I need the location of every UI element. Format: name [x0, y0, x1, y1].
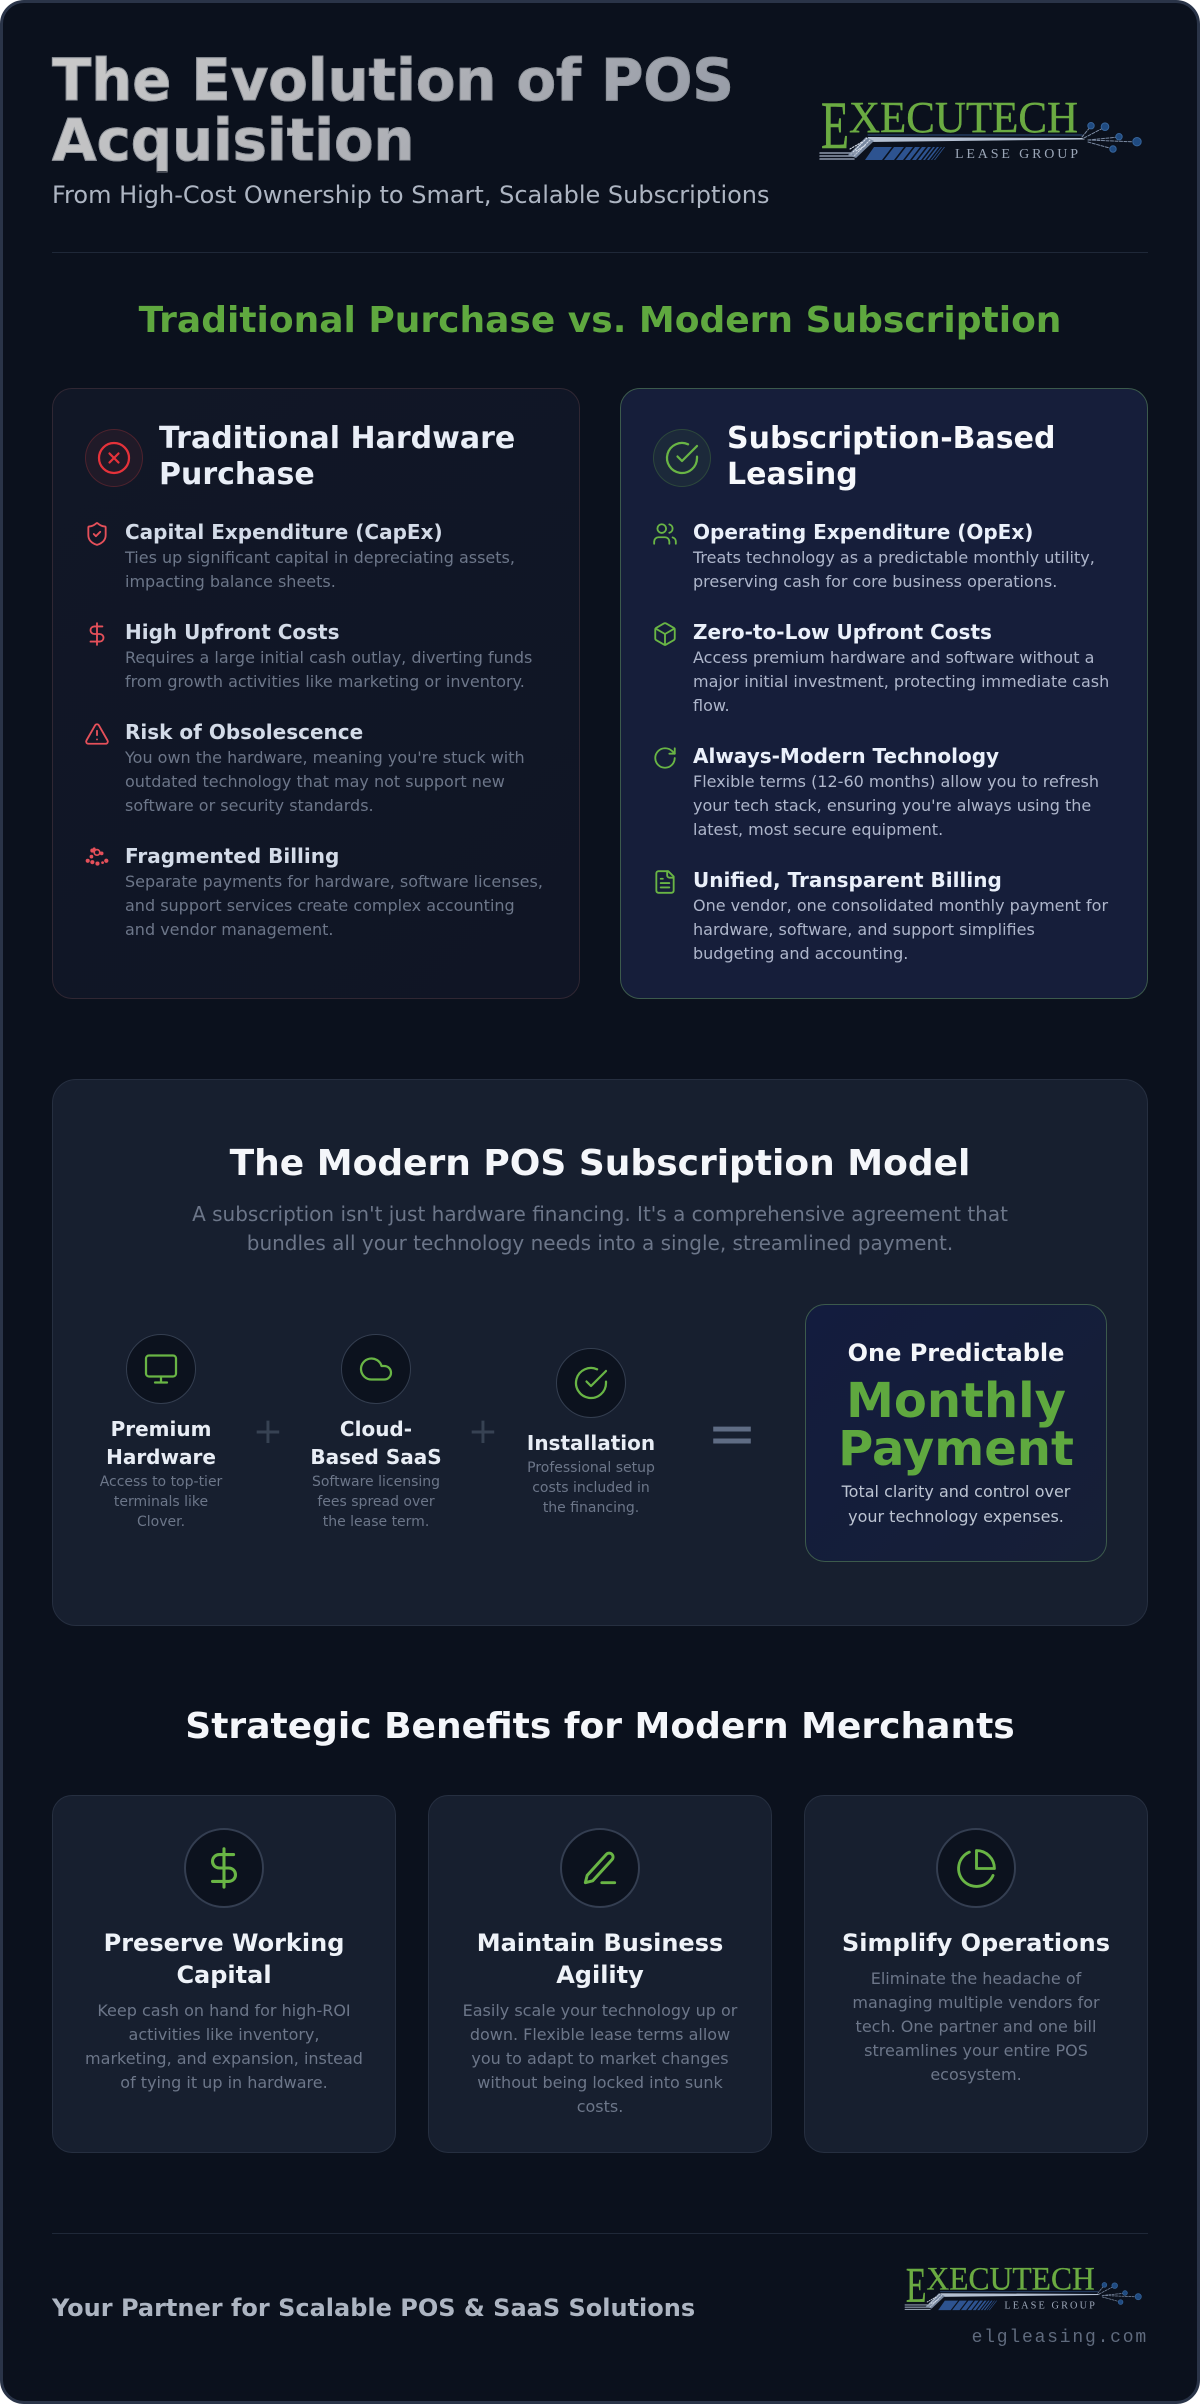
panel: traditional hardware purchase: Ties up significant capital in depreciating assets,: [125, 548, 515, 567]
heading: strategic benefits: Strategic Benefits for Modern Merchants: [185, 1706, 1015, 1747]
panel: subscription-based leasing: Zero-to-Low Upfront Costs: [693, 620, 992, 644]
callout: one predictable monthly payment: One Predictable: [848, 1339, 1064, 1367]
benefit card: simplify operations: [804, 1795, 1148, 2153]
benefit card: business agility: Agility: [556, 1961, 644, 1989]
panel: modern POS subscription model: [52, 1079, 1148, 1626]
step: cloud SaaS: Cloud-: [340, 1417, 412, 1441]
benefit card: working capital: activities like inventory,: [129, 2025, 319, 2044]
benefit card: simplify operations: Simplify Operations: [842, 1929, 1110, 1957]
logo: Executech Lease Group: E: [821, 87, 849, 163]
panel: traditional hardware purchase: impacting balance sheets.: [125, 572, 336, 591]
step: cloud SaaS: the lease term.: [323, 1514, 429, 1530]
benefit card: working capital: of tying it up in hardware.: [120, 2073, 328, 2092]
benefit card: business agility: down. Flexible lease terms allow: [470, 2025, 730, 2044]
callout: one predictable monthly payment: [805, 1304, 1107, 1562]
panel: traditional hardware purchase: Capital Expenditure (CapEx): [125, 520, 443, 544]
panel heading: Subscription-Based: [727, 421, 1055, 456]
header title: The Evolution of POS: [52, 47, 734, 114]
benefit card: business agility: without being locked into sunk: [477, 2073, 723, 2092]
item: opex: [653, 520, 1095, 591]
benefit card: working capital: Keep cash on hand for high-ROI: [97, 2001, 351, 2020]
panel: traditional hardware purchase: You own the hardware, meaning you're stuck with: [125, 748, 525, 767]
step: premium hardware: terminals like: [114, 1494, 208, 1510]
step: premium hardware: [100, 1334, 222, 1530]
panel: subscription-based leasing: Operating Expenditure (OpEx): [693, 520, 1033, 544]
icon: check circle: [653, 429, 711, 487]
item: fragmented billing: [86, 844, 543, 939]
panel: subscription-based leasing: Treats technology as a predictable monthly utility,: [693, 548, 1095, 567]
icon: cloud: [341, 1334, 411, 1404]
benefit card: business agility: Easily scale your technology up or: [463, 2001, 737, 2020]
plus sign: +: [468, 1411, 498, 1452]
panel: subscription-based leasing: One vendor, one consolidated monthly payment for: [693, 896, 1108, 915]
equals sign: =: [707, 1399, 757, 1469]
icon: monitor: [126, 1334, 196, 1404]
panel heading: [159, 421, 515, 492]
panel: traditional hardware purchase: [52, 388, 580, 999]
panel heading: Traditional Hardware: [159, 421, 515, 456]
step: installation: [527, 1348, 655, 1516]
icon: x circle: [85, 429, 143, 487]
panel: subscription-based leasing: latest, most secure equipment.: [693, 820, 943, 839]
step: premium hardware: Hardware: [106, 1445, 216, 1469]
text: subscription model intro: A subscription isn't just hardware financing. It's a comprehensive agreement that: [192, 1202, 1008, 1226]
item: upfront costs: [90, 620, 532, 691]
item: obsolescence: [85, 720, 525, 815]
icon: pie chart: [936, 1828, 1016, 1908]
section heading: comparison: Traditional Purchase vs. Modern Subscription: [139, 300, 1061, 341]
plus sign: +: [253, 1411, 283, 1452]
icon: dollar: [184, 1828, 264, 1908]
callout: one predictable monthly payment: Total clarity and control over: [842, 1482, 1070, 1501]
panel: traditional hardware purchase: and support services create complex accounting: [125, 896, 515, 915]
callout: one predictable monthly payment: Monthly: [846, 1373, 1066, 1429]
text: subscription model intro: bundles all your technology needs into a single, streamlined payment.: [247, 1231, 953, 1255]
panel: traditional hardware purchase: High Upfront Costs: [125, 620, 340, 644]
footer logo: XECUTECH: [926, 2261, 1095, 2297]
step: premium hardware: Access to top-tier: [100, 1474, 222, 1490]
footer logo: LEASE GROUP: [1004, 2301, 1095, 2312]
panel: subscription-based leasing: Flexible terms (12-60 months) allow you to refresh: [693, 772, 1099, 791]
step: cloud SaaS: Based SaaS: [310, 1445, 442, 1469]
benefit card: business agility: you to adapt to market changes: [471, 2049, 729, 2068]
step: premium hardware: Premium: [111, 1417, 211, 1441]
heading: subscription model: The Modern POS Subscription Model: [230, 1143, 970, 1184]
panel: traditional hardware purchase: from growth activities like marketing or inventory.: [125, 672, 525, 691]
step: cloud SaaS: [310, 1334, 442, 1530]
panel: subscription-based leasing: budgeting and accounting.: [693, 944, 908, 963]
panel: subscription-based leasing: flow.: [693, 696, 730, 715]
step: installation: the financing.: [543, 1500, 639, 1516]
panel: traditional hardware purchase: outdated technology that may not support new: [125, 772, 505, 791]
footer tagline: Your Partner for Scalable POS & SaaS Solutions: [52, 2294, 695, 2322]
panel: subscription-based leasing: hardware, software, and support simplifies: [693, 920, 1035, 939]
panel heading: Leasing: [727, 457, 858, 492]
panel: traditional hardware purchase: software or security standards.: [125, 796, 374, 815]
callout: one predictable monthly payment: Payment: [838, 1421, 1074, 1477]
panel: traditional hardware purchase: Requires a large initial cash outlay, diverting funds: [125, 648, 532, 667]
benefit card: simplify operations: ecosystem.: [930, 2065, 1022, 2084]
item: upfront costs: [654, 620, 1109, 715]
item: modern technology: [654, 744, 1099, 839]
callout: one predictable monthly payment: your technology expenses.: [848, 1507, 1064, 1526]
step: installation: Installation: [527, 1431, 655, 1455]
panel: subscription-based leasing: [620, 388, 1148, 999]
step: cloud SaaS: fees spread over: [317, 1494, 435, 1510]
panel: traditional hardware purchase: and vendor management.: [125, 920, 334, 939]
panel: subscription-based leasing: preserving cash for core business operations.: [693, 572, 1057, 591]
panel: traditional hardware purchase: Fragmented Billing: [125, 844, 339, 868]
header title: [52, 51, 734, 171]
logo: Executech Lease Group: LEASE GROUP: [955, 147, 1078, 162]
icon: check circle: [556, 1348, 626, 1418]
step: installation: Professional setup: [527, 1460, 655, 1476]
benefit card: business agility: costs.: [577, 2097, 623, 2116]
step: premium hardware: Clover.: [137, 1514, 185, 1530]
footer logo: E: [906, 2256, 926, 2312]
benefit card: simplify operations: managing multiple vendors for: [852, 1993, 1100, 2012]
header title: Acquisition: [52, 107, 415, 174]
panel: subscription-based leasing: Always-Modern Technology: [693, 744, 999, 768]
logo: Executech Lease Group: XECUTECH: [849, 93, 1078, 142]
step: installation: costs included in: [532, 1480, 650, 1496]
panel: subscription-based leasing: Access premium hardware and software without a: [693, 648, 1094, 667]
benefit card: working capital: Capital: [176, 1961, 272, 1989]
benefit card: simplify operations: streamlines your entire POS: [864, 2041, 1088, 2060]
benefit card: business agility: [428, 1795, 772, 2153]
header subtitle: From High-Cost Ownership to Smart, Scalable Subscriptions: [52, 181, 770, 209]
panel heading: Purchase: [159, 457, 315, 492]
panel: subscription-based leasing: Unified, Transparent Billing: [693, 868, 1002, 892]
logo: Executech Lease Group: [819, 87, 1142, 163]
text: subscription model intro: [192, 1202, 1008, 1255]
benefit card: working capital: Preserve Working: [104, 1929, 344, 1957]
benefit card: working capital: [52, 1795, 396, 2153]
benefit card: simplify operations: Eliminate the headache of: [871, 1969, 1081, 1988]
benefit card: business agility: Maintain Business: [477, 1929, 723, 1957]
footer logo: [904, 2256, 1142, 2312]
panel: subscription-based leasing: major initial investment, protecting immediate cash: [693, 672, 1109, 691]
item: unified billing: [655, 868, 1108, 963]
item: capex: [87, 520, 515, 591]
step: cloud SaaS: Software licensing: [312, 1474, 440, 1490]
panel: traditional hardware purchase: Risk of Obsolescence: [125, 720, 363, 744]
benefit card: simplify operations: tech. One partner and one bill: [856, 2017, 1096, 2036]
panel heading: [727, 421, 1055, 492]
panel: traditional hardware purchase: Separate payments for hardware, software licenses,: [125, 872, 543, 891]
footer website: elgleasing.com: [972, 2328, 1148, 2348]
icon: pen: [560, 1828, 640, 1908]
panel: subscription-based leasing: your tech stack, ensuring you're always using the: [693, 796, 1091, 815]
benefit card: working capital: marketing, and expansion, instead: [85, 2049, 363, 2068]
